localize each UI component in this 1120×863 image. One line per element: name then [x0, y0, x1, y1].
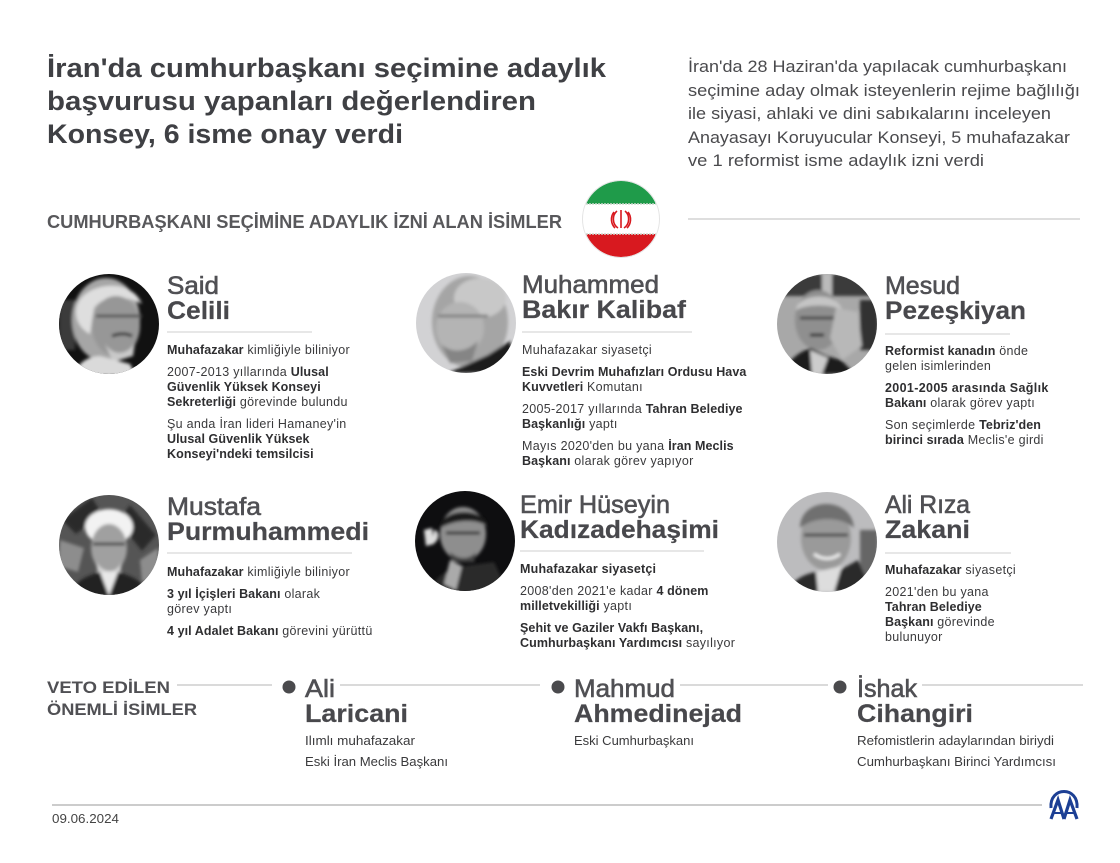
heading: vetoed names: ÖNEMLİ İSİMLER: [47, 700, 197, 719]
name: Kadızadehaşimi: [520, 516, 719, 544]
title: İran'da cumhurbaşkanı seçimine adaylık: [47, 53, 607, 83]
bio: Güvenlik Yüksek Konseyi: [167, 380, 321, 394]
bio: Kuvvetleri Komutanı: [522, 380, 643, 394]
bio: gelen isimlerinden: [885, 359, 991, 373]
date: 09.06.2024: [52, 812, 119, 826]
bio: Muhafazakar kimliğiyle biliniyor: [167, 343, 350, 357]
bio: Eski İran Meclis Başkanı: [305, 755, 448, 769]
name: Pezeşkiyan: [885, 297, 1026, 325]
title: Konsey, 6 isme onay verdi: [47, 119, 403, 149]
bio: Ilımlı muhafazakar: [305, 734, 415, 748]
bio: bulunuyor: [885, 630, 943, 644]
name: Said: [167, 272, 219, 300]
portrait: Kalibaf: [416, 273, 518, 373]
bio: 2001-2005 arasında Sağlık: [885, 381, 1049, 395]
panel: Ali Rıza Zakani: [777, 491, 1016, 644]
bio: 2008'den 2021'e kadar 4 dönem: [520, 584, 708, 598]
intro text: İran'da 28 Haziran'da yapılacak cumhurbaşkanı: [688, 57, 1067, 76]
bio: Başkanı görevinde: [885, 615, 995, 629]
bio: 2005-2017 yıllarında Tahran Belediye: [522, 402, 743, 416]
title: başvurusu yapanları değerlendiren: [47, 86, 536, 116]
bio: [857, 734, 1056, 769]
name: Purmuhammedi: [167, 518, 369, 546]
bio: [167, 343, 350, 461]
name: [167, 493, 369, 546]
name: [574, 675, 742, 728]
bio: Ulusal Güvenlik Yüksek: [167, 432, 310, 446]
panel: Muhammed Bakır Kalibaf: [416, 271, 747, 468]
title: [47, 53, 607, 149]
bio: Şehit ve Gaziler Vakfı Başkanı,: [520, 621, 703, 635]
bio: [167, 565, 373, 638]
portrait: Kadızadehaşimi: [415, 491, 515, 592]
bio: [522, 343, 747, 468]
bio: Refomistlerin adaylarından biriydi: [857, 734, 1054, 748]
bio: Muhafazakar siyasetçi: [520, 562, 656, 576]
bio: 2007-2013 yıllarında Ulusal: [167, 365, 329, 379]
bio: Eski Devrim Muhafızları Ordusu Hava: [522, 365, 747, 379]
bio: Cumhurbaşkanı Birinci Yardımcısı: [857, 755, 1056, 769]
bio: Muhafazakar siyasetçi: [885, 563, 1016, 577]
bullet: [834, 680, 846, 694]
bio: Muhafazakar kimliğiyle biliniyor: [167, 565, 350, 579]
heading: vetoed names: VETO EDİLEN: [47, 678, 170, 697]
bio: Son seçimlerde Tebriz'den: [885, 418, 1041, 432]
name: Emir Hüseyin: [520, 491, 670, 519]
bio: Sekreterliği görevinde bulundu: [167, 395, 348, 409]
panel: Ali Laricani: [282, 675, 540, 769]
bio: Mayıs 2020'den bu yana İran Meclis: [522, 438, 734, 453]
name: İshak: [857, 674, 917, 703]
bio: birinci sırada Meclis'e girdi: [885, 433, 1044, 447]
name: Celili: [167, 297, 230, 325]
bio: Bakanı olarak görev yaptı: [885, 396, 1035, 410]
panel: Mesud Pezeşkiyan: [777, 272, 1049, 447]
name: Muhammed: [522, 271, 659, 299]
heading: vetoed names: [47, 678, 197, 719]
bio: Başkanı olarak görev yapıyor: [522, 454, 694, 468]
section heading: CUMHURBAŞKANI SEÇİMİNE ADAYLIK İZNİ ALAN İSİMLER: [47, 212, 562, 232]
intro text: ile siyasi, ahlaki ve dini sabıkalarını inceleyen: [688, 105, 1051, 123]
panel: Said Celili: [59, 272, 350, 461]
intro text: seçimine aday olmak isteyenlerin rejime bağlılığı: [688, 82, 1080, 100]
portrait: Said Celili: [59, 274, 159, 376]
panel: İshak Cihangiri: [834, 674, 1083, 769]
bio: [520, 562, 735, 650]
bio: [885, 344, 1049, 447]
name: Mesud: [885, 272, 960, 300]
name: Cihangiri: [857, 700, 973, 728]
bio: Muhafazakar siyasetçi: [522, 343, 652, 357]
name: Ahmedinejad: [574, 700, 742, 728]
bio: Şu anda İran lideri Hamaney'in: [167, 417, 347, 431]
name: [520, 491, 719, 544]
bullet: [552, 680, 564, 694]
intro text: [688, 57, 1080, 170]
bullet: [282, 680, 296, 694]
name: Zakani: [885, 516, 970, 544]
portrait: Zakani: [777, 492, 878, 592]
bio: görev yaptı: [167, 602, 232, 616]
name: Mustafa: [167, 493, 261, 521]
bio: Eski Cumhurbaşkanı: [574, 734, 694, 748]
name: [305, 675, 408, 728]
bio: 3 yıl İçişleri Bakanı olarak: [167, 586, 321, 601]
name: Ali Rıza: [885, 491, 970, 519]
portrait: Pezeşkiyan: [777, 274, 878, 374]
bio: milletvekilliği yaptı: [520, 599, 632, 613]
icon: AA logo: [1051, 792, 1077, 819]
intro text: Anayasayı Koruyucular Konseyi, 5 muhafazakar: [688, 129, 1071, 147]
bio: [885, 563, 1016, 644]
name: Ali: [305, 675, 335, 703]
intro text: ve 1 reformist isme adaylık izni verdi: [688, 152, 984, 170]
name: [885, 272, 1026, 325]
name: Bakır Kalibaf: [522, 296, 687, 324]
panel: Mustafa Purmuhammedi: [58, 493, 373, 638]
bio: 4 yıl Adalet Bakanı görevini yürüttü: [167, 624, 373, 638]
name: [885, 491, 970, 544]
bio: Cumhurbaşkanı Yardımcısı sayılıyor: [520, 636, 735, 650]
bio: Konseyi'ndeki temsilcisi: [167, 447, 314, 461]
portrait: Purmuhammedi: [58, 495, 160, 596]
icon: Iran flag: [582, 180, 660, 258]
name: Laricani: [305, 700, 408, 728]
bio: 2021'den bu yana: [885, 585, 989, 599]
bio: [305, 734, 448, 769]
name: [522, 271, 687, 324]
bio: Tahran Belediye: [885, 600, 982, 614]
panel: Mahmud Ahmedinejad: [552, 675, 828, 748]
bio: Reformist kanadın önde: [885, 344, 1028, 358]
name: [167, 272, 230, 325]
bio: Başkanlığı yaptı: [522, 417, 618, 431]
name: Mahmud: [574, 675, 675, 703]
panel: Emir Hüseyin Kadızadehaşimi: [415, 491, 735, 650]
name: [857, 674, 973, 728]
